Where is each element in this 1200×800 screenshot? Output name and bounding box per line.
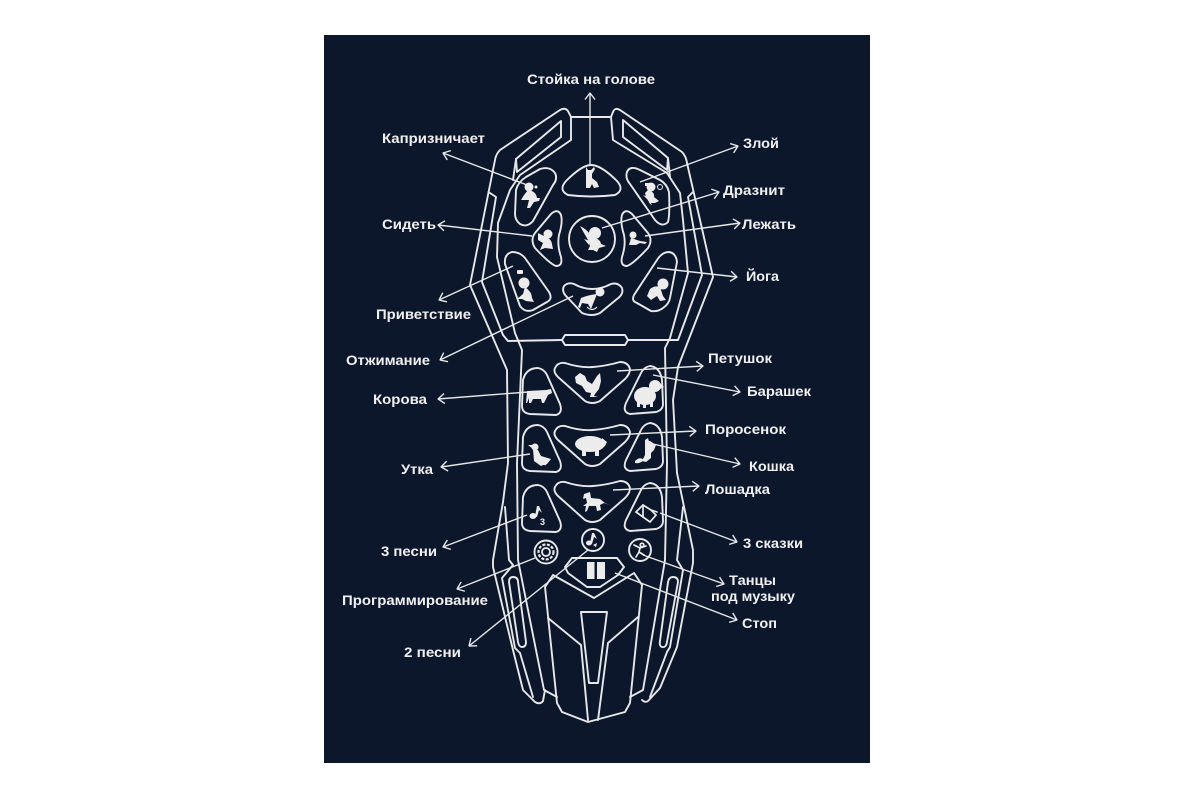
label: Танцы под музыку	[711, 572, 795, 604]
icon: greeting puppy	[517, 270, 534, 302]
dark background panel	[324, 35, 870, 763]
icon: sheep	[634, 380, 664, 408]
label: Капризничает: Капризничает	[382, 130, 485, 146]
icon: push-up puppy	[578, 288, 604, 310]
icon: storybook	[636, 505, 657, 522]
label: Корова: Корова	[373, 391, 427, 407]
arrow: Злой	[640, 146, 738, 182]
label: Лошадка: Лошадка	[705, 481, 770, 497]
label: Отжимание: Отжимание	[346, 352, 430, 368]
label: Приветствие: Приветствие	[376, 306, 471, 322]
icon: two songs note	[586, 533, 597, 547]
arrow: Капризничает	[443, 153, 527, 185]
arrow: Стойка на голове	[589, 93, 591, 165]
arrow: Дразнит	[602, 192, 719, 228]
arrow: Барашек	[653, 375, 740, 392]
label: Дразнит: Дразнит	[723, 182, 785, 198]
icon: rooster	[575, 373, 601, 397]
icon: three songs note: 3	[540, 517, 545, 527]
arrow: Стоп	[615, 573, 737, 620]
icon: capricious puppy	[521, 182, 540, 208]
icon: horse	[583, 492, 610, 512]
arrow: Корова	[438, 392, 528, 399]
icon: handstand	[586, 167, 599, 188]
arrow: Приветствие	[439, 266, 513, 300]
icon: teasing puppy	[580, 226, 606, 252]
label: Стоп: Стоп	[742, 615, 777, 631]
icon: pig	[575, 436, 607, 456]
icon: cat	[635, 438, 656, 463]
label: Танцы под музыку: под музыку	[711, 588, 795, 604]
label: 3 сказки: 3 сказки	[743, 535, 803, 551]
icon: angry puppy	[643, 182, 662, 205]
arrow: Йога	[657, 268, 737, 277]
label: Сидеть: Сидеть	[382, 216, 436, 232]
icon: duck	[528, 444, 551, 466]
icon: settings gear	[538, 544, 554, 560]
icon: dancing figure	[634, 543, 646, 557]
arrow: Петушок	[617, 366, 703, 371]
arrow: Танцы под музыку	[643, 555, 724, 584]
icon: lying puppy	[629, 232, 647, 245]
arrow: Лежать	[645, 223, 740, 236]
icon: yoga puppy	[647, 278, 668, 301]
remote body outline	[470, 109, 713, 722]
title label: Стойка на голове: Стойка на голове	[527, 71, 655, 87]
label: 3 песни: 3 песни	[381, 543, 437, 559]
label: Кошка: Кошка	[749, 458, 794, 474]
arrow: 3 сказки	[660, 513, 737, 542]
icon: three songs note	[530, 506, 545, 527]
arrow: 2 песни	[469, 550, 588, 646]
arrow: Программирование	[457, 558, 535, 589]
label: 2 песни: 2 песни	[404, 644, 461, 660]
label: Программирование: Программирование	[342, 592, 488, 608]
label: Утка: Утка	[401, 461, 433, 477]
icon: cow	[526, 389, 552, 403]
label: Петушок: Петушок	[708, 350, 773, 366]
arrow: Сидеть	[438, 225, 532, 236]
label: Барашек: Барашек	[747, 383, 812, 399]
label: Поросенок: Поросенок	[705, 421, 787, 437]
arrow: Поросенок	[610, 431, 696, 435]
arrow: Отжимание	[440, 296, 573, 360]
arrow: 3 песни	[443, 515, 527, 547]
arrow: Утка	[441, 454, 530, 467]
arrow: Лошадка	[613, 486, 699, 490]
icon: pause bars	[587, 562, 605, 579]
label: Злой: Злой	[743, 135, 779, 151]
buttons: action and animal outlines	[505, 165, 677, 564]
label: Йога: Йога	[746, 267, 779, 284]
arrow: Кошка	[653, 444, 740, 464]
label: Танцы под музыку: Танцы	[729, 572, 776, 588]
icon: sitting puppy	[538, 230, 553, 250]
label: Лежать: Лежать	[742, 216, 796, 232]
